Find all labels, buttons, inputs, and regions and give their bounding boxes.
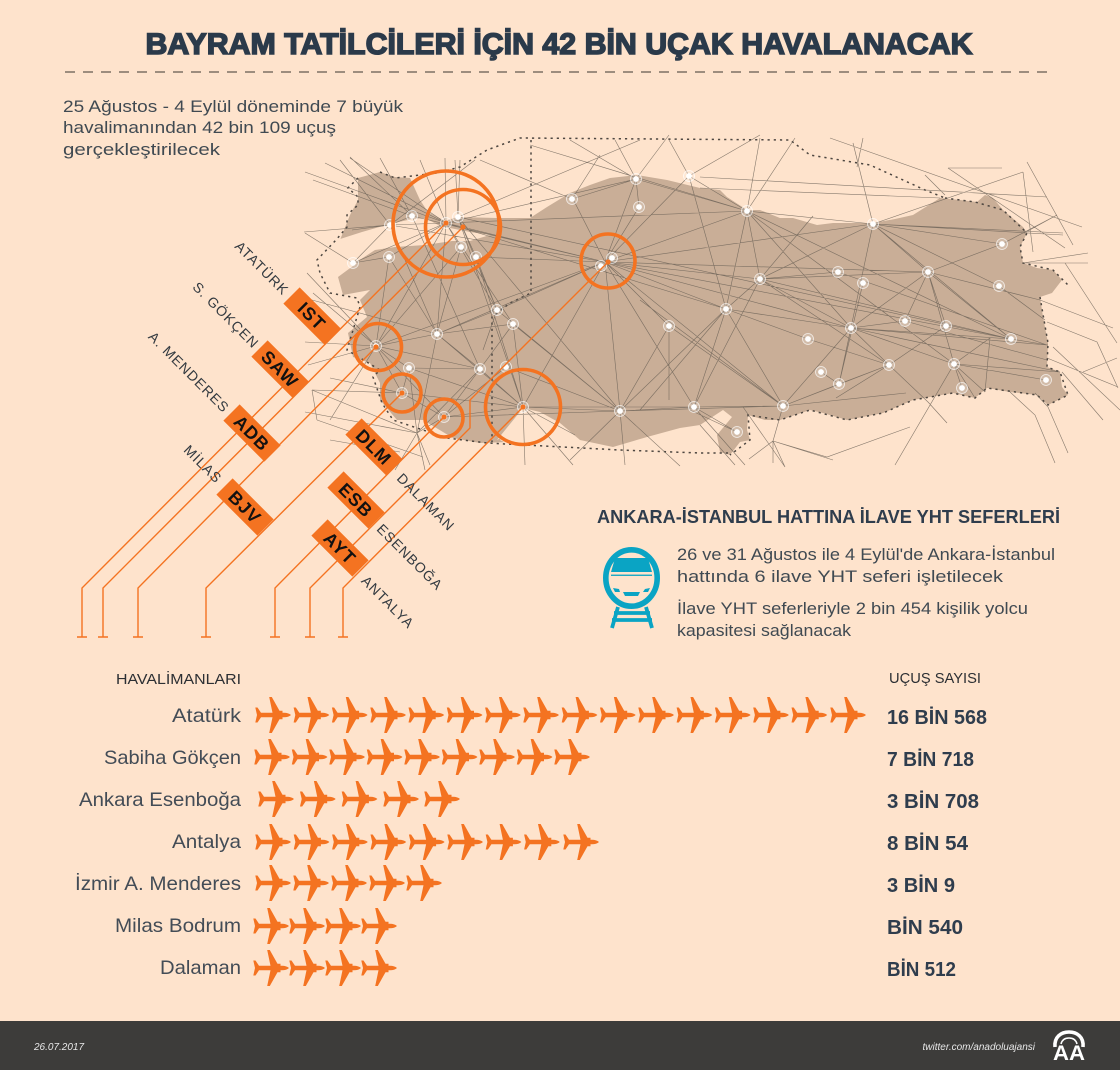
airport name labels: A. MENDERES (145, 328, 233, 416)
airport name labels: ATATÜRK (232, 237, 293, 298)
flight count values: 8 BİN 54 (887, 832, 969, 855)
pictogram row: Sabiha Gökçen (254, 739, 590, 775)
airport code tag: BJV (216, 478, 274, 536)
airport code tag: ESB: ESB (334, 479, 377, 522)
airport code tag: BJV: BJV (224, 487, 265, 528)
airport code tag: ESB (327, 471, 385, 529)
airport code tag: DLM: DLM (352, 425, 396, 469)
airport row labels: Ankara Esenboğa (79, 789, 241, 811)
flight count values (887, 706, 987, 981)
icon: agency logo (1053, 1032, 1085, 1065)
map: dotted borders (317, 138, 1068, 455)
airport circles (354, 171, 635, 444)
airport code tag: SAW (251, 340, 309, 398)
YHT text: 26 ve 31 Ağustos ile 4 Eylül'de Ankara-İstanbul (677, 545, 1055, 564)
intro text: gerçekleştirilecek (63, 140, 221, 159)
table headers: UÇUŞ SAYISI (889, 671, 981, 687)
pictogram row: İzmir A. Menderes (255, 865, 442, 901)
airport code tag: SAW: SAW (257, 347, 302, 392)
airport row labels (75, 705, 241, 979)
YHT text: İlave YHT seferleriyle 2 bin 454 kişilik yolcu (677, 599, 1028, 618)
flight count values: 16 BİN 568 (887, 706, 987, 729)
airport code tag: ADB (223, 404, 281, 462)
table headers: HAVALİMANLARI (116, 670, 241, 688)
pictogram row: Ankara Esenboğa (258, 781, 460, 817)
flight count values: BİN 540 (887, 916, 963, 939)
airport row labels: Antalya (172, 831, 241, 853)
pictogram row: Antalya (255, 824, 599, 860)
airport row labels: Dalaman (160, 957, 241, 979)
airport name labels (145, 237, 458, 632)
airport code tag: AYT (311, 519, 369, 577)
airport name labels: S. GÖKÇEN (190, 278, 263, 351)
airport row labels: Sabiha Gökçen (104, 747, 241, 769)
icon: train (606, 550, 657, 628)
intro text: havalimanından 42 bin 109 uçuş (63, 118, 336, 137)
map of Turkey with flight routes (304, 135, 1120, 470)
YHT text: hattında 6 ilave YHT seferi işletilecek (677, 567, 1004, 586)
map: land (338, 172, 1068, 455)
airport row labels: Milas Bodrum (115, 915, 241, 937)
airport name labels: ESENBOĞA (374, 521, 446, 593)
map: route lines (304, 135, 1120, 470)
flight count values: BİN 512 (887, 958, 956, 981)
intro text: 25 Ağustos - 4 Eylül döneminde 7 büyük (63, 97, 404, 116)
map: Sea of Marmara (337, 218, 490, 263)
airport row labels: Atatürk (172, 705, 241, 727)
airport name labels: DALAMAN (394, 470, 458, 534)
orange leader lines (77, 223, 608, 637)
date: 26.07.2017 (33, 1042, 84, 1053)
pictogram row: Atatürk (255, 697, 866, 733)
flight count values: 3 BİN 9 (887, 874, 955, 897)
intro text (63, 97, 404, 159)
social handle: twitter.com/anadoluajansi (923, 1042, 1036, 1053)
table headers (116, 670, 981, 688)
airport code tag: DLM (345, 418, 403, 476)
pictogram row: Dalaman (253, 950, 397, 986)
airport name labels: ANTALYA (358, 572, 418, 632)
pictogram row: Milas Bodrum (253, 908, 397, 944)
YHT heading: ANKARA-İSTANBUL HATTINA İLAVE YHT SEFERLERİ (597, 507, 1060, 527)
flight count values: 7 BİN 718 (887, 748, 974, 771)
map: Antalya bay (500, 408, 578, 445)
airport nodes (348, 170, 1052, 438)
YHT text (677, 545, 1055, 640)
airport row labels: İzmir A. Menderes (75, 872, 241, 895)
footer bar (0, 1021, 1120, 1070)
airport code tag: AYT: AYT (319, 528, 360, 569)
airport code tag: ADB: ADB (230, 411, 274, 455)
airport code tag: IST (283, 287, 341, 345)
icon: agency logo: AA (1053, 1042, 1085, 1065)
title: BAYRAM TATİLCİLERİ İÇİN 42 BİN UÇAK HAVALANACAK (146, 28, 973, 61)
airport code tag: IST: IST (294, 298, 330, 334)
flight count values: 3 BİN 708 (887, 790, 979, 813)
YHT text: kapasitesi sağlanacak (677, 621, 852, 640)
airport name labels: MİLAS (181, 441, 226, 486)
